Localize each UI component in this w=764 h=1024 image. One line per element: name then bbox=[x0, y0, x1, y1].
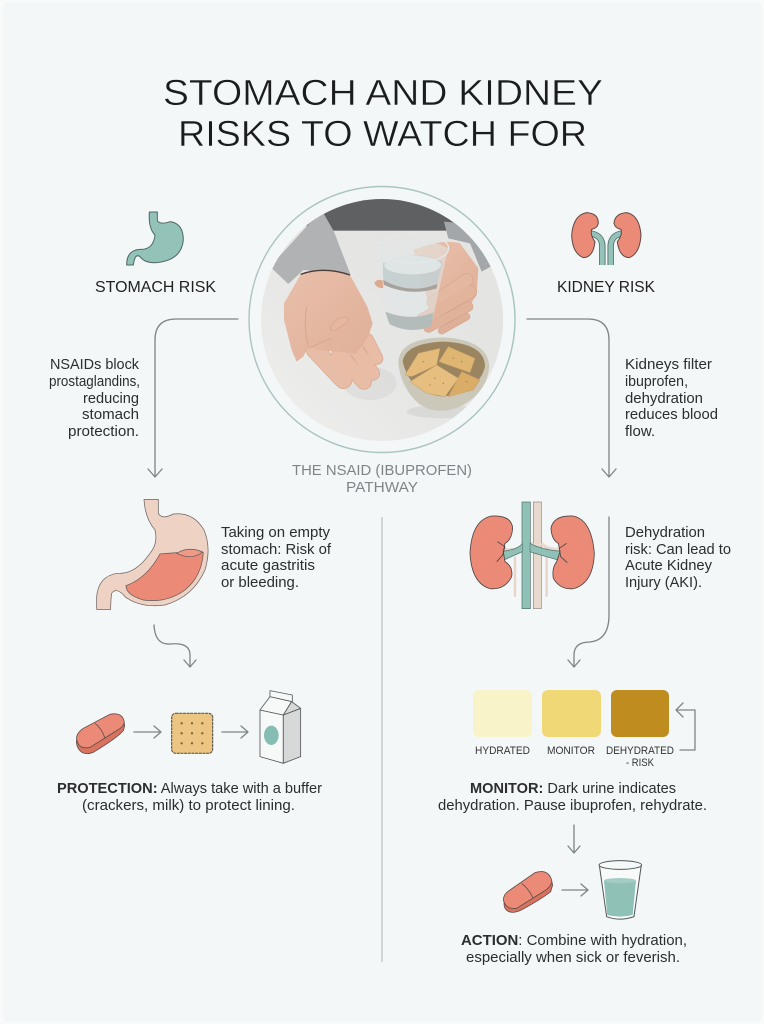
text: dehydration risk bbox=[625, 524, 731, 591]
photo caption: THE NSAID (IBUPROFEN) bbox=[292, 463, 472, 479]
icon: small stomach bbox=[127, 212, 183, 265]
icon: pill bbox=[76, 714, 125, 754]
text: action bbox=[461, 932, 687, 966]
swatch: dehydrated risk: DEHYDRATED bbox=[606, 745, 674, 757]
photo caption: PATHWAY bbox=[346, 480, 418, 496]
text: kidney explanation bbox=[625, 356, 718, 440]
text: NSAIDs explanation: protection. bbox=[68, 423, 139, 440]
icon: protection sequence pill, cracker, milk bbox=[76, 691, 301, 763]
text: empty stomach risk: acute gastritis bbox=[221, 557, 315, 574]
photo caption bbox=[292, 463, 472, 496]
icon: glass of water bbox=[599, 861, 642, 919]
arrow: stomach to protection bbox=[154, 625, 196, 667]
text: action: especially when sick or feverish. bbox=[466, 949, 680, 966]
text: empty stomach risk: stomach: Risk of bbox=[221, 541, 332, 558]
text: NSAIDs explanation: NSAIDs block bbox=[50, 356, 139, 373]
icon: large stomach with irritated lining bbox=[97, 499, 208, 609]
text: protection: (crackers, milk) to protect lining. bbox=[82, 797, 295, 814]
swatch: hydrated bbox=[473, 690, 532, 757]
text: kidney explanation: reduces blood bbox=[625, 406, 718, 423]
arrow: monitor to action bbox=[568, 825, 580, 853]
table shadow bbox=[343, 367, 397, 400]
left sleeve bbox=[270, 210, 351, 284]
heading: kidney risk: KIDNEY RISK bbox=[557, 279, 655, 296]
text: empty stomach risk bbox=[221, 524, 332, 591]
text: dehydration risk: Acute Kidney bbox=[625, 557, 712, 574]
arrow: dehydrated callback bbox=[676, 703, 695, 750]
swatch: monitor bbox=[542, 690, 601, 757]
center divider line bbox=[381, 517, 383, 962]
title bbox=[163, 72, 603, 154]
arrow: pill to water bbox=[562, 884, 588, 896]
text: kidney explanation: Kidneys filter bbox=[625, 356, 712, 373]
heading: stomach risk: STOMACH RISK bbox=[95, 279, 216, 296]
crackers bbox=[405, 347, 480, 397]
text: protection: PROTECTION: Always take with a buffer bbox=[57, 780, 322, 797]
title: STOMACH AND KIDNEY bbox=[163, 72, 603, 113]
swatch: monitor: MONITOR bbox=[547, 745, 595, 757]
icon: milk carton bbox=[260, 691, 301, 763]
dark shirt bbox=[306, 199, 464, 231]
chart: urine colour scale bbox=[473, 690, 674, 769]
icon: small kidneys bbox=[572, 213, 641, 265]
swatch: hydrated: HYDRATED bbox=[475, 745, 530, 757]
text: action: ACTION: Combine with hydration, bbox=[461, 932, 687, 949]
panel: central photo of hand with pills, water and crackers bbox=[249, 186, 515, 457]
text: monitor bbox=[438, 780, 707, 814]
text: kidney explanation: dehydration bbox=[625, 390, 703, 407]
icon: action pill bbox=[503, 872, 553, 912]
arrow: stomach pathway down bbox=[148, 319, 238, 477]
text: NSAIDs explanation bbox=[49, 356, 140, 440]
title: RISKS TO WATCH FOR bbox=[178, 113, 587, 154]
icon: large kidneys with vessels bbox=[470, 502, 594, 609]
bowl bbox=[406, 406, 466, 418]
text: NSAIDs explanation: reducing bbox=[83, 390, 139, 407]
arrow: kidney to monitor bbox=[568, 517, 609, 667]
swatch: dehydrated risk bbox=[606, 690, 674, 769]
arrow: kidney pathway down bbox=[527, 319, 616, 477]
text: monitor: dehydration. Pause ibuprofen, rehydrate. bbox=[438, 797, 707, 814]
text: protection bbox=[57, 780, 322, 814]
text: monitor: MONITOR: Dark urine indicates bbox=[470, 780, 676, 797]
text: kidney explanation: ibuprofen, bbox=[625, 373, 688, 390]
text: dehydration risk: Dehydration bbox=[625, 524, 705, 541]
glass hand bbox=[413, 242, 478, 327]
open hand bbox=[315, 340, 377, 382]
text: dehydration risk: Injury (AKI). bbox=[625, 574, 702, 591]
icon: cracker bbox=[172, 713, 213, 753]
text: kidney explanation: flow. bbox=[625, 423, 655, 440]
right sleeve bbox=[444, 222, 490, 272]
water glass bbox=[382, 243, 448, 320]
text: empty stomach risk: or bleeding. bbox=[221, 574, 299, 591]
swatch: dehydrated risk: - RISK bbox=[626, 757, 655, 769]
text: empty stomach risk: Taking on empty bbox=[221, 524, 330, 541]
text: dehydration risk: risk: Can lead to bbox=[625, 541, 731, 558]
text: NSAIDs explanation: stomach bbox=[82, 406, 139, 423]
text: NSAIDs explanation: prostaglandins, bbox=[49, 373, 140, 390]
